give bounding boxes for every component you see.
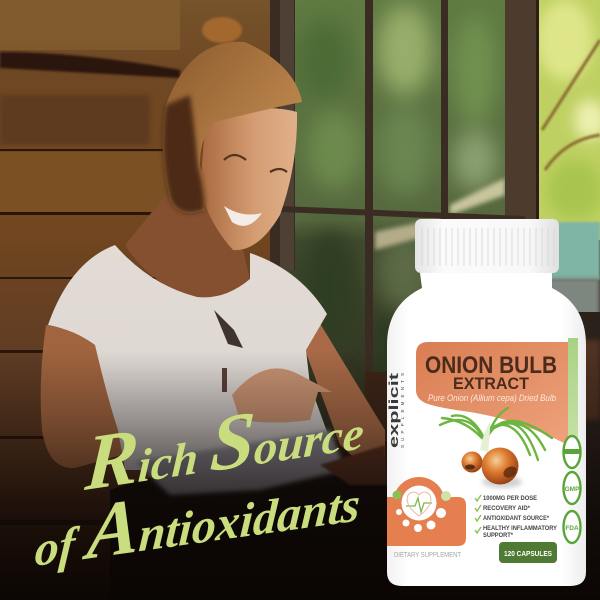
neck	[125, 195, 250, 297]
heart icon panel	[387, 477, 466, 546]
outdoor trees and street	[537, 0, 600, 600]
hand	[232, 368, 332, 422]
shirt	[48, 245, 330, 470]
benefit checklist: ANTIOXIDANT SOURCE*	[483, 516, 550, 522]
benefit checklist: 1000MG PER DOSE	[483, 496, 537, 502]
benefit checklist: SUPPORT*	[483, 533, 514, 539]
certification badges: GMP	[565, 486, 580, 493]
heartbeat	[406, 498, 432, 512]
head and face	[200, 108, 297, 250]
subtitle: Pure Onion (Allium cepa) Dried Bulb	[428, 393, 556, 404]
product name line 2: EXTRACT	[453, 374, 530, 393]
right arm	[305, 320, 385, 485]
window frame	[265, 0, 539, 442]
brand logo: SUPPLEMENTS	[400, 373, 405, 448]
product name: ONION BULB	[425, 352, 557, 379]
supplement bottle	[387, 219, 586, 586]
headline line 1: Rich Source	[82, 379, 367, 508]
wood plank wall	[0, 0, 270, 600]
hair bun	[202, 17, 242, 43]
dietary supplement label: DIETARY SUPPLEMENT	[394, 550, 461, 559]
window glass with foliage	[265, 0, 540, 440]
certification badges: FDA	[565, 525, 579, 532]
benefit checklist	[475, 495, 557, 539]
woman	[41, 17, 400, 600]
headline line 2: of Antioxidants	[33, 451, 364, 584]
benefit checklist: RECOVERY AID*	[483, 506, 531, 512]
icon: onion plant	[440, 408, 552, 488]
phone hand	[320, 445, 388, 485]
brand logo	[387, 372, 405, 448]
bottle cap	[415, 219, 559, 273]
capsule count badge	[499, 542, 557, 563]
hair	[163, 42, 302, 213]
benefit checklist: HEALTHY INFLAMMATORY	[483, 526, 557, 532]
certification badges	[564, 436, 580, 543]
bottle body	[387, 273, 586, 586]
brand logo: explicit	[387, 372, 401, 448]
shirt brooch	[214, 310, 243, 348]
capsule count badge: 120 CAPSULES	[504, 551, 552, 558]
orange title panel	[416, 342, 568, 445]
smile	[224, 206, 262, 226]
lap	[110, 459, 400, 600]
left arm	[41, 325, 270, 468]
bottom dark vignette	[0, 350, 600, 600]
headline: rich source of antioxidants	[33, 379, 367, 584]
green stripe	[568, 338, 578, 448]
